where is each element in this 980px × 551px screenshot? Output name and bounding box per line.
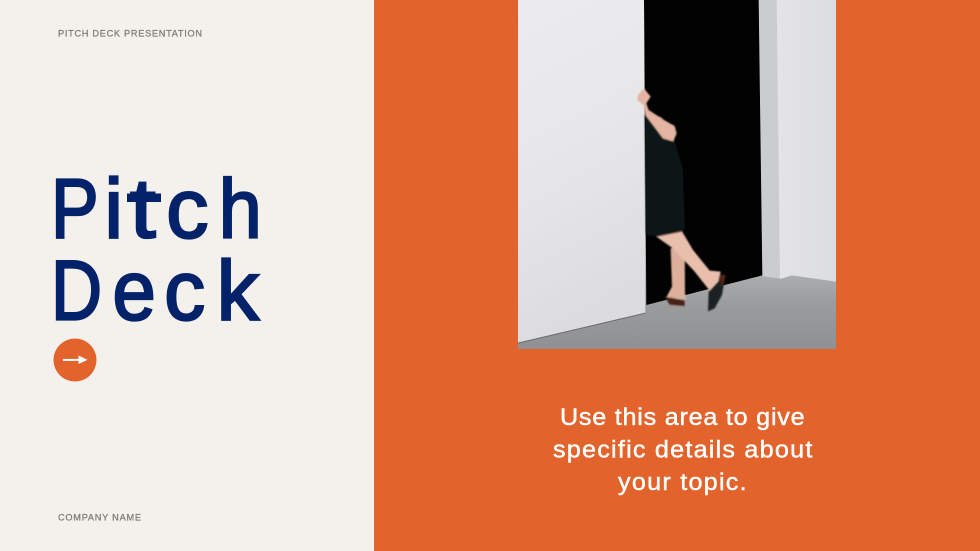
title: c xyxy=(166,162,209,256)
title: h xyxy=(219,163,262,256)
eyebrow label: PITCH DECK PRESENTATION xyxy=(58,28,202,38)
body text: your topic. xyxy=(618,470,747,496)
title xyxy=(51,161,262,338)
title: t xyxy=(130,161,156,256)
panel: left cream background xyxy=(0,0,374,551)
title: e xyxy=(112,245,156,338)
body text: specific details about xyxy=(553,437,813,463)
title: D xyxy=(51,245,102,338)
icon: arrow button xyxy=(54,338,96,382)
title: i xyxy=(104,162,123,256)
title: c xyxy=(164,243,205,338)
photo: woman in black dress at doorway xyxy=(518,0,836,349)
body text xyxy=(553,405,813,496)
company label: COMPANY NAME xyxy=(58,512,141,522)
title: P xyxy=(51,161,99,256)
body text: Use this area to give xyxy=(560,405,805,431)
title: k xyxy=(217,244,260,337)
panel: right orange background xyxy=(374,0,980,551)
